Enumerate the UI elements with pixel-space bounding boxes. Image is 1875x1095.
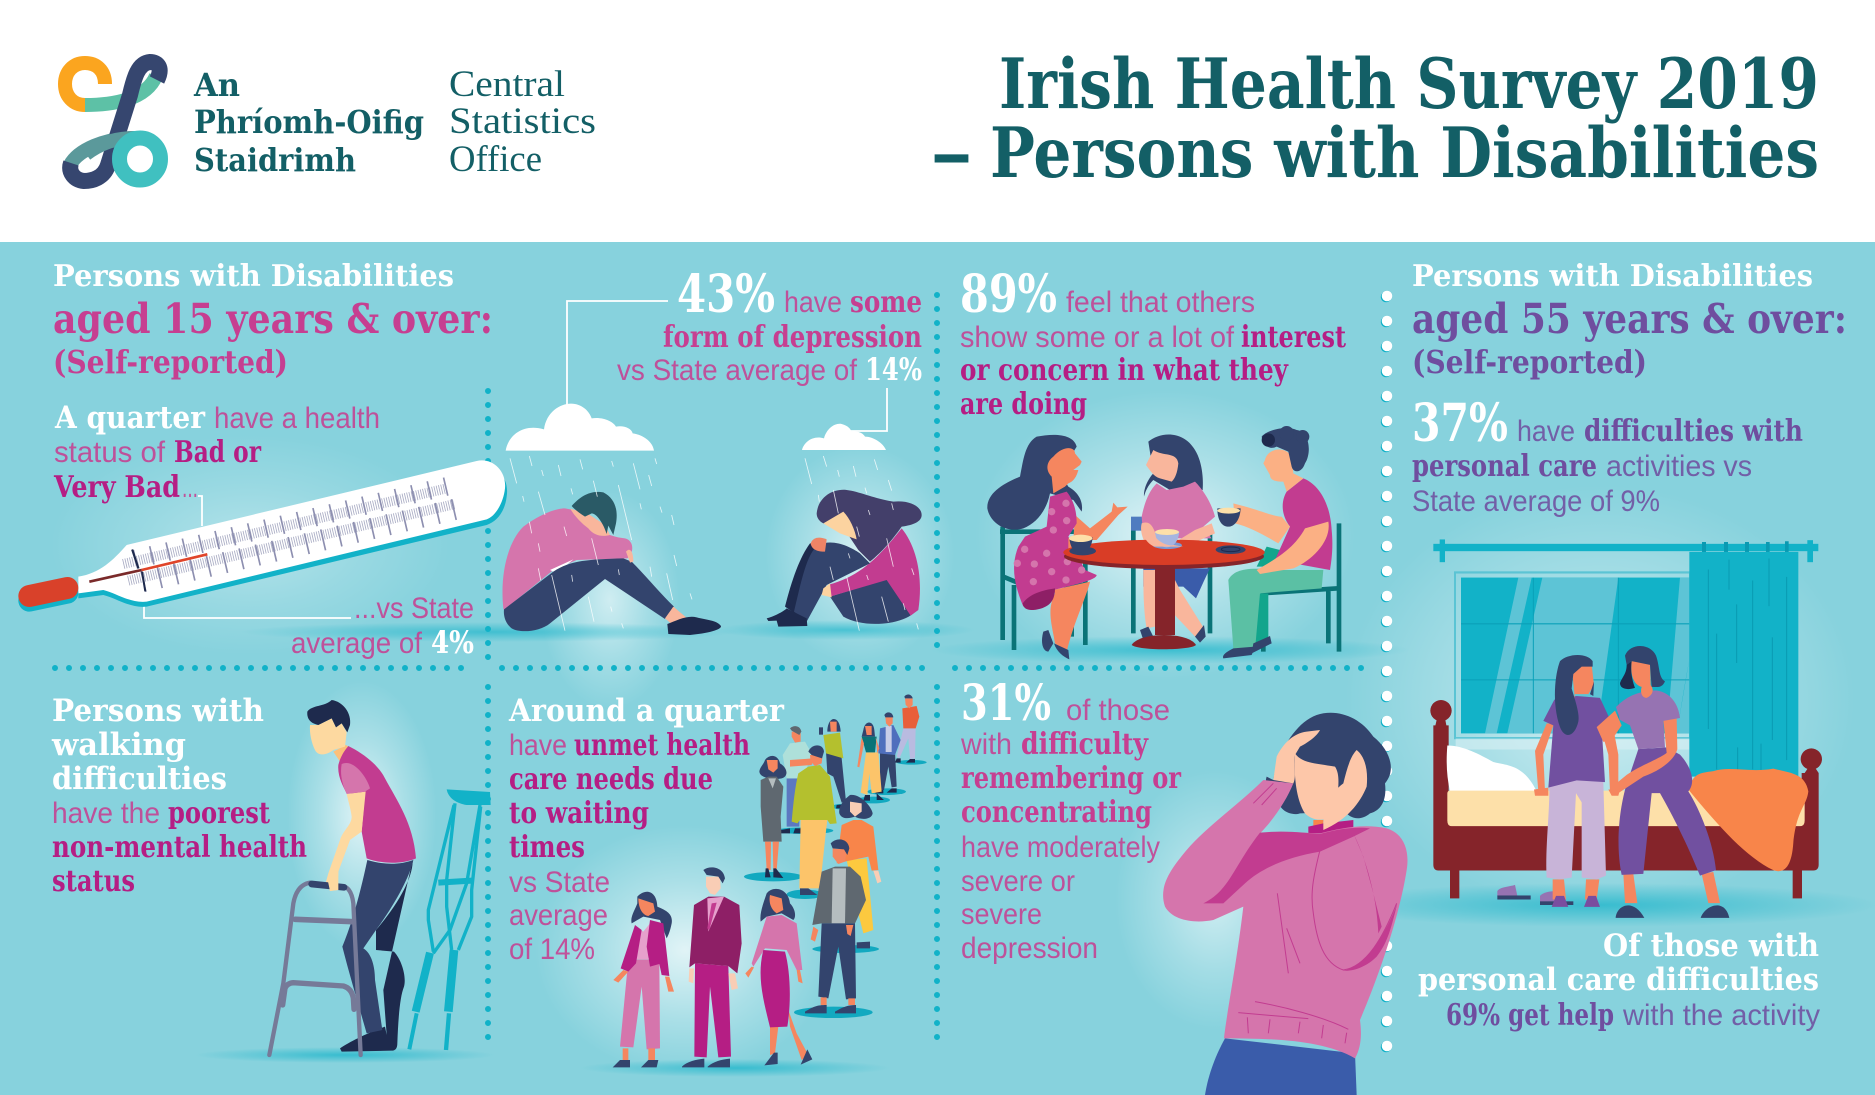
man in burgundy suit xyxy=(682,867,742,1067)
panel: remembering or concentrating text: have moderately xyxy=(961,831,1160,864)
girl in purple t-shirt xyxy=(1534,655,1620,907)
panel: thermometer text: ... xyxy=(182,471,198,504)
panel: unmet health care text: average xyxy=(509,899,608,932)
panel: unmet health care text: to waiting xyxy=(509,796,649,831)
man xyxy=(307,700,416,1052)
panel: aged 15 years and over heading: (Self-reported) xyxy=(53,343,288,381)
man in magenta shirt xyxy=(1217,426,1332,658)
panel: unmet health care text: Around a quarter xyxy=(508,693,785,729)
panel: thermometer text: 4% xyxy=(431,625,474,661)
panel: remembering or concentrating text: severe or xyxy=(961,865,1075,898)
man in pale t-shirt xyxy=(781,726,813,833)
panel: walking difficulties text: status xyxy=(52,864,135,899)
curtain rail xyxy=(1433,539,1818,562)
leader lines: thermometer xyxy=(144,496,351,618)
panel: interest or concern text: interest xyxy=(1241,320,1346,355)
logo text: English name: Office xyxy=(449,139,542,180)
panel: remembering or concentrating text xyxy=(960,673,1182,965)
panel: remembering or concentrating text: severe xyxy=(961,898,1042,931)
panel: aged 55 years and over heading: (Self-reported) xyxy=(1412,343,1647,381)
logo: Central Statistics Office xyxy=(65,62,596,181)
illustration: man under rain cloud xyxy=(502,404,721,635)
logo text: Irish name: An xyxy=(193,66,240,104)
curtain xyxy=(1679,552,1798,777)
panel: interest or concern text: are doing xyxy=(960,387,1087,422)
panel: depression text: form of depression xyxy=(663,320,922,355)
panel: walking difficulties text xyxy=(51,693,307,899)
panel: depression text: 14% xyxy=(865,352,922,388)
woman in grey suit xyxy=(759,756,786,878)
mother in violet t-shirt xyxy=(1597,646,1729,918)
window xyxy=(1455,572,1690,750)
chairs xyxy=(1000,523,1339,652)
woman in pink top xyxy=(1140,434,1215,643)
logo text: English name xyxy=(449,64,596,180)
title: – xyxy=(930,113,973,194)
logo text: English name: Statistics xyxy=(449,101,596,142)
illustration: front row of people xyxy=(613,867,879,1067)
panel: remembering or concentrating text: of those xyxy=(1066,694,1170,727)
panel: remembering or concentrating text: concentrating xyxy=(961,795,1152,830)
man in grey jacket xyxy=(812,839,866,940)
background glows and floor shadows xyxy=(50,390,1875,1077)
panel: remembering or concentrating text: with xyxy=(960,728,1012,761)
panel: 69 percent get help text: with the activity xyxy=(1622,999,1820,1032)
panel: personal care text: have xyxy=(1517,415,1575,448)
leader lines: clouds xyxy=(567,301,887,431)
woman in teal top xyxy=(857,722,884,801)
panel: interest or concern text: show some or a lot of xyxy=(960,321,1235,354)
logo text: Irish name: Phríomh-Oifig xyxy=(194,103,424,141)
panel: depression text xyxy=(617,264,922,388)
woman in pink top and magenta skirt xyxy=(745,889,812,1065)
panel: personal care text: 37% xyxy=(1412,393,1508,454)
panel: remembering or concentrating text: remembering or xyxy=(961,761,1182,796)
icon: knot symbol xyxy=(65,62,160,181)
table xyxy=(1063,527,1265,649)
logo text: English name: Central xyxy=(449,64,565,105)
panel: personal care text: personal care xyxy=(1412,449,1597,484)
panel: remembering or concentrating text: depression xyxy=(961,932,1098,965)
woman figure xyxy=(767,490,922,627)
woman in polka dot dress xyxy=(987,435,1128,659)
panel: interest or concern text: 89% xyxy=(960,264,1057,325)
panel: aged 15 years and over heading: aged 15 years & over: xyxy=(53,295,493,343)
panel: walking difficulties text: non-mental health xyxy=(52,830,307,865)
panel: depression text: vs State average of xyxy=(617,354,858,387)
panel: unmet health care text: vs State xyxy=(509,866,610,899)
panel: thermometer text: have a health xyxy=(214,402,380,435)
panel: unmet health care text: care needs due xyxy=(509,762,713,797)
illustration: woman holding her head xyxy=(1163,713,1407,1095)
panel: 69 percent get help text: Of those with xyxy=(1603,928,1819,964)
panel: thermometer text: Bad or xyxy=(174,435,262,470)
woman in orange jumper xyxy=(837,795,881,933)
panel: walking difficulties text: walking xyxy=(51,727,186,763)
woman in magenta blazer xyxy=(613,892,674,1067)
illustration: queue of people xyxy=(744,695,927,940)
panel: aged 15 years and over heading: Persons with Disabilities xyxy=(53,259,454,294)
panel: interest or concern text: or concern in what they xyxy=(960,353,1289,388)
panel: depression text: some xyxy=(850,285,922,320)
panel: depression text: 43% xyxy=(677,264,775,325)
panel: aged 55 years and over heading: Persons with Disabilities xyxy=(1412,259,1813,294)
panel: thermometer text xyxy=(53,400,474,661)
panel: remembering or concentrating text: 31% xyxy=(961,673,1051,732)
rain xyxy=(510,456,692,631)
panel: personal care text: difficulties with xyxy=(1584,414,1803,449)
panel: thermometer text: status of xyxy=(54,436,166,469)
illustration: woman under small cloud xyxy=(767,424,922,631)
woman in green top with phone xyxy=(819,719,846,808)
panel: 69 percent get help text xyxy=(1418,928,1820,1033)
discs under man xyxy=(794,945,879,1018)
panel: interest or concern text xyxy=(960,264,1346,422)
panel: aged 55 years and over heading xyxy=(1412,259,1847,381)
panel: unmet health care text: of 14% xyxy=(509,933,595,966)
icon: large cloud xyxy=(506,404,654,451)
illustration: man with walking frame and crutches xyxy=(269,700,491,1055)
illustration: bedroom with two women xyxy=(1430,539,1822,918)
panel: thermometer text: A quarter xyxy=(54,400,206,436)
logo text: Irish name xyxy=(193,66,424,179)
man in green jumper xyxy=(792,745,837,895)
rain xyxy=(805,456,918,631)
logo text: Irish name: Staidrimh xyxy=(194,141,356,179)
panel: personal care text: State average of 9% xyxy=(1412,485,1660,518)
panel: walking difficulties text: Persons with xyxy=(52,693,264,729)
walking frame xyxy=(269,869,361,1055)
dotted dividers xyxy=(55,295,1387,1048)
panel: walking difficulties text: have the xyxy=(52,797,160,830)
panel: thermometer text: Very Bad xyxy=(53,470,180,505)
bed xyxy=(1430,700,1822,898)
panel: personal care text: activities vs xyxy=(1606,450,1752,483)
panel: unmet health care text: times xyxy=(509,830,585,865)
icon: thermometer xyxy=(29,460,507,607)
panel: unmet health care text: unmet health xyxy=(574,728,750,763)
panel: thermometer text: average of xyxy=(291,627,423,660)
panel: walking difficulties text: difficulties xyxy=(52,761,227,797)
panel: 69 percent get help text: personal care difficulties xyxy=(1418,962,1819,998)
man figure xyxy=(502,492,721,635)
lower part of man in grey jacket xyxy=(805,923,870,1013)
panel: aged 15 years and over heading xyxy=(53,259,493,381)
queue floor discs xyxy=(744,760,927,899)
panel: unmet health care text: have xyxy=(509,729,567,762)
panel: unmet health care text xyxy=(508,693,785,966)
person in orange t-shirt xyxy=(895,695,919,763)
crutches xyxy=(409,789,491,1050)
title xyxy=(930,44,1819,194)
man in blue jacket xyxy=(875,712,901,793)
slippers xyxy=(1497,885,1573,905)
panel: personal care text xyxy=(1412,393,1803,518)
panel: 69 percent get help text: 69% get help xyxy=(1446,998,1614,1033)
illustration: three people at a cafe table xyxy=(987,426,1339,659)
panel: walking difficulties text: poorest xyxy=(168,796,270,831)
panel: interest or concern text: feel that others xyxy=(1066,286,1255,319)
icon: small cloud xyxy=(802,424,886,450)
panel: remembering or concentrating text: difficulty xyxy=(1021,727,1149,762)
panel: thermometer text: ...vs State xyxy=(354,592,474,625)
panel: depression text: have xyxy=(784,286,842,319)
